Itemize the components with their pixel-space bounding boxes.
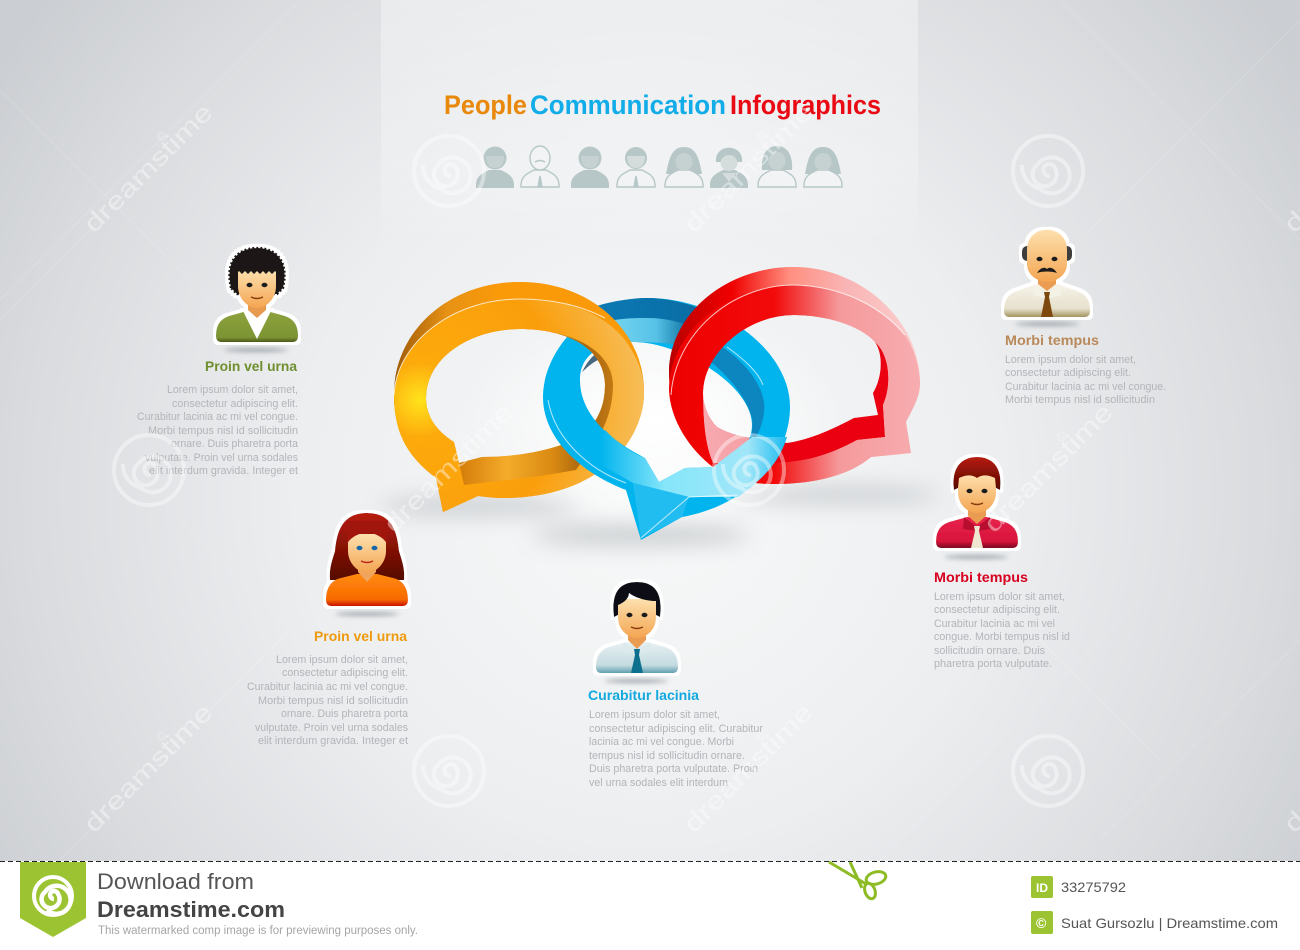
body text [934,591,1070,670]
body text: elit interdum gravida. Integer et [149,465,298,477]
icon: woman curly hair [758,146,796,187]
body text: Curabitur lacinia ac mi vel congue. [247,681,408,693]
body text: Curabitur lacinia ac mi vel congue. [137,411,298,423]
red ring passing over blue [669,267,918,367]
icon: man in jacket [571,146,609,188]
avatar: man in red shirt [936,457,1018,548]
body text: elit interdum gravida. Integer et [258,735,408,747]
download text: Download from [97,869,254,894]
title: Communication [530,90,726,120]
title: People [444,90,527,120]
image id: ID [1036,881,1048,895]
body text: ornare. Duis pharetra porta [281,708,409,720]
body text: lacinia ac mi vel congue. Morbi [589,736,734,748]
body text: consectetur adipiscing elit. [172,398,298,410]
heading: Curabitur lacinia [588,687,699,703]
avatar: black haired man [596,582,678,673]
body text: Lorem ipsum dolor sit amet, [167,384,298,396]
person: orange top [247,513,409,747]
body text: Lorem ipsum dolor sit amet, [934,591,1065,603]
icon: woman long hair [665,147,703,187]
body text: pharetra porta vulputate. [934,658,1052,670]
body text [247,654,409,747]
download text [97,869,418,937]
body text: consectetur adipiscing elit. [934,604,1060,616]
body text: vulputate. Proin vel urna sodales [145,452,298,464]
avatar: curly haired man [216,248,298,342]
title [444,90,881,120]
icon: bald man [521,146,559,187]
body text: vulputate. Proin vel urna sodales [255,722,408,734]
top centre panel [381,0,918,245]
image id [1031,876,1126,898]
red speech bubble [669,267,920,484]
heading: Morbi tempus [934,569,1028,585]
body text: consectetur adipiscing elit. [282,667,408,679]
avatar: red haired woman [326,513,408,606]
blue speech bubble [543,298,790,540]
row of small people icons [476,146,842,188]
body text: consectetur adipiscing elit. Curabitur [589,723,763,735]
body text: Lorem ipsum dolor sit amet, [276,654,408,666]
icon: green ribbon [20,862,86,937]
title: Infographics [730,90,881,120]
body text [137,384,299,477]
icon: man in suit [476,146,514,188]
body text: Curabitur lacinia ac mi vel [934,618,1055,630]
body text: Lorem ipsum dolor sit amet, [589,709,720,721]
person: bald man [1004,230,1166,406]
orange ring passing over blue [394,282,644,417]
person: blue shirt [588,582,763,789]
heading: Proin vel urna [314,628,407,644]
image id: 33275792 [1061,879,1126,895]
body text: consectetur adipiscing elit. [1005,367,1131,379]
body text: congue. Morbi tempus nisl id [934,631,1070,643]
footer strip [0,861,1300,950]
body text: Duis pharetra porta vulputate. Proin [589,763,758,775]
body text: Lorem ipsum dolor sit amet, [1005,354,1136,366]
speech bubble rings [394,267,920,540]
body text: sollicitudin ornare. Duis [934,645,1045,657]
watermarks [73,93,1300,838]
body text: Morbi tempus nisl id sollicitudin [148,425,298,437]
body text [1005,354,1166,406]
body text: tempus nisl id sollicitudin ornare. [589,750,745,762]
avatar: bald man with moustache [1004,230,1090,317]
body text: ornare. Duis pharetra porta [171,438,299,450]
author credit: © [1036,915,1047,931]
body text: Morbi tempus nisl id sollicitudin [258,695,408,707]
floor shadows [380,310,940,546]
body text: vel urna sodales elit interdum [589,777,728,789]
person: red shirt [934,457,1070,670]
body text [589,709,763,789]
person: green sweater [137,248,299,477]
heading: Morbi tempus [1005,332,1099,348]
body text: Curabitur lacinia ac mi vel congue. [1005,381,1166,393]
body text: Morbi tempus nisl id sollicitudin [1005,394,1155,406]
download text: This watermarked comp image is for previewing purposes only. [98,925,418,937]
icon: man in shirt [617,147,655,187]
icon: woman dark hair [804,147,842,187]
download text: Dreamstime.com [97,897,285,922]
icon: scissors [829,862,887,900]
author credit [1031,911,1278,934]
heading: Proin vel urna [205,358,297,374]
author credit: Suat Gursozlu | Dreamstime.com [1061,915,1278,931]
icon: woman short hair [710,148,748,188]
orange speech bubble [394,282,644,512]
